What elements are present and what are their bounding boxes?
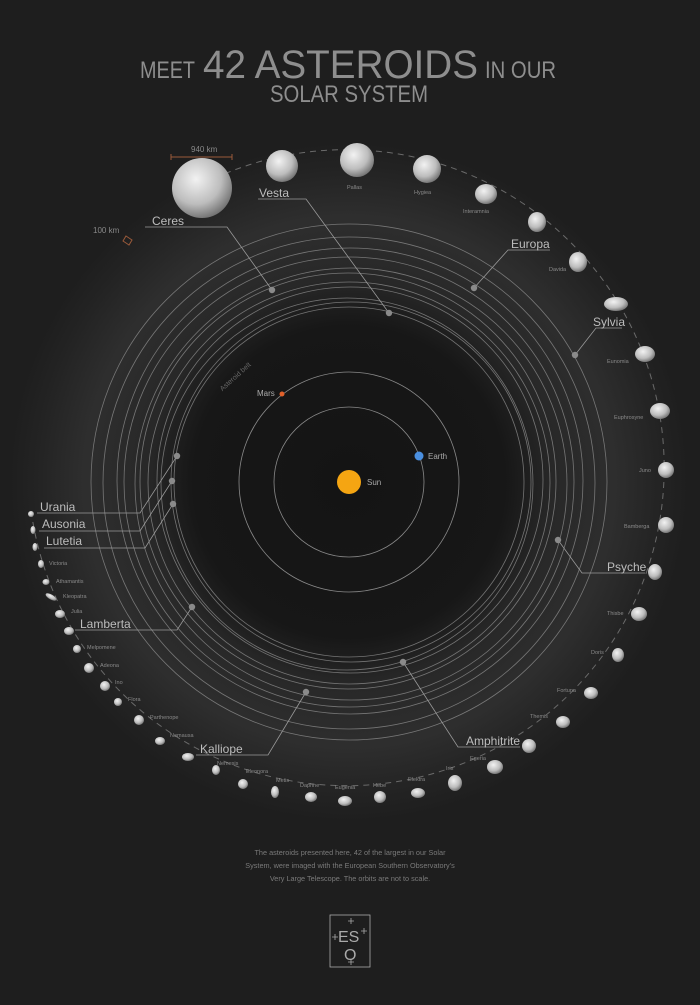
major labels: Vesta	[259, 186, 289, 200]
title: MEET	[140, 57, 195, 84]
mars	[257, 389, 284, 398]
minor labels: Eunomia	[607, 359, 630, 365]
sun	[337, 470, 381, 494]
major labels: Amphitrite	[466, 734, 520, 748]
dashed asteroid track	[31, 150, 664, 786]
minor labels: Athamantis	[56, 579, 84, 585]
minor labels: Juno	[639, 468, 651, 474]
minor labels: Metis	[276, 778, 289, 784]
text: 100 km	[93, 226, 120, 235]
major labels: Europa	[511, 237, 550, 251]
minor labels: Interamnia	[463, 209, 490, 215]
major labels: Lamberta	[80, 617, 131, 631]
label: asteroid belt: Asteroid belt	[219, 362, 253, 393]
minor labels: Julia	[71, 609, 83, 615]
text: 940 km	[191, 145, 218, 154]
earth: Earth	[428, 452, 447, 461]
caption: Very Large Telescope. The orbits are not to scale.	[270, 874, 430, 883]
ESO logo: O	[344, 947, 356, 964]
sun: Sun	[367, 478, 381, 487]
caption: System, were imaged with the European Southern Observatory's	[245, 861, 455, 870]
title	[140, 43, 556, 108]
minor labels: Daphne	[300, 783, 319, 789]
major labels: Lutetia	[46, 534, 82, 548]
orbits: inner planets	[239, 372, 459, 592]
ESO logo: ES	[338, 929, 359, 946]
minor labels: Iris	[446, 766, 454, 772]
major labels	[40, 186, 647, 756]
minor labels: Fortuna	[557, 688, 577, 694]
caption: The asteroids presented here, 42 of the largest in our Solar	[254, 848, 446, 857]
background glow	[9, 142, 689, 822]
earth	[414, 452, 447, 461]
minor labels: Thisbe	[607, 611, 624, 617]
major labels: Ceres	[152, 214, 184, 228]
scale bars	[123, 154, 232, 245]
minor labels: Nemesis	[217, 761, 239, 767]
minor labels: Pallas	[347, 185, 362, 191]
minor labels: Ino	[115, 680, 123, 686]
mars: Mars	[257, 389, 275, 398]
minor labels: Themis	[530, 714, 548, 720]
minor labels: Melpomene	[87, 645, 116, 651]
minor labels: Flora	[128, 697, 141, 703]
minor labels: Adeona	[100, 663, 120, 669]
major labels: Kalliope	[200, 742, 243, 756]
major labels: Ausonia	[42, 517, 86, 531]
title: SOLAR SYSTEM	[270, 81, 428, 108]
minor labels: Davida	[549, 267, 567, 273]
ESO logo	[330, 915, 370, 967]
minor labels: Nemausa	[170, 733, 194, 739]
minor labels: Euphrosyne	[614, 415, 643, 421]
title: 42 ASTEROIDS	[203, 43, 478, 87]
major labels: Urania	[40, 500, 76, 514]
orbits: asteroid belt	[91, 224, 607, 740]
minor labels: Hebe	[373, 783, 386, 789]
minor labels: Eugenia	[335, 785, 356, 791]
minor labels	[49, 185, 651, 791]
asteroids	[28, 143, 674, 806]
title: IN OUR	[485, 57, 556, 84]
leader lines and dots	[37, 199, 645, 755]
minor labels: Doris	[591, 650, 604, 656]
minor labels: Kleopatra	[63, 594, 87, 600]
major labels: Psyche	[607, 560, 647, 574]
minor labels: Bamberga	[624, 524, 650, 530]
minor labels: Hygiea	[414, 190, 432, 196]
major labels: Sylvia	[593, 315, 625, 329]
minor labels: Victoria	[49, 561, 68, 567]
minor labels: Elektra	[408, 777, 426, 783]
minor labels: Eleonora	[246, 769, 269, 775]
minor labels: Parthenope	[150, 715, 178, 721]
caption	[245, 848, 455, 883]
minor labels: Egeria	[470, 756, 487, 762]
